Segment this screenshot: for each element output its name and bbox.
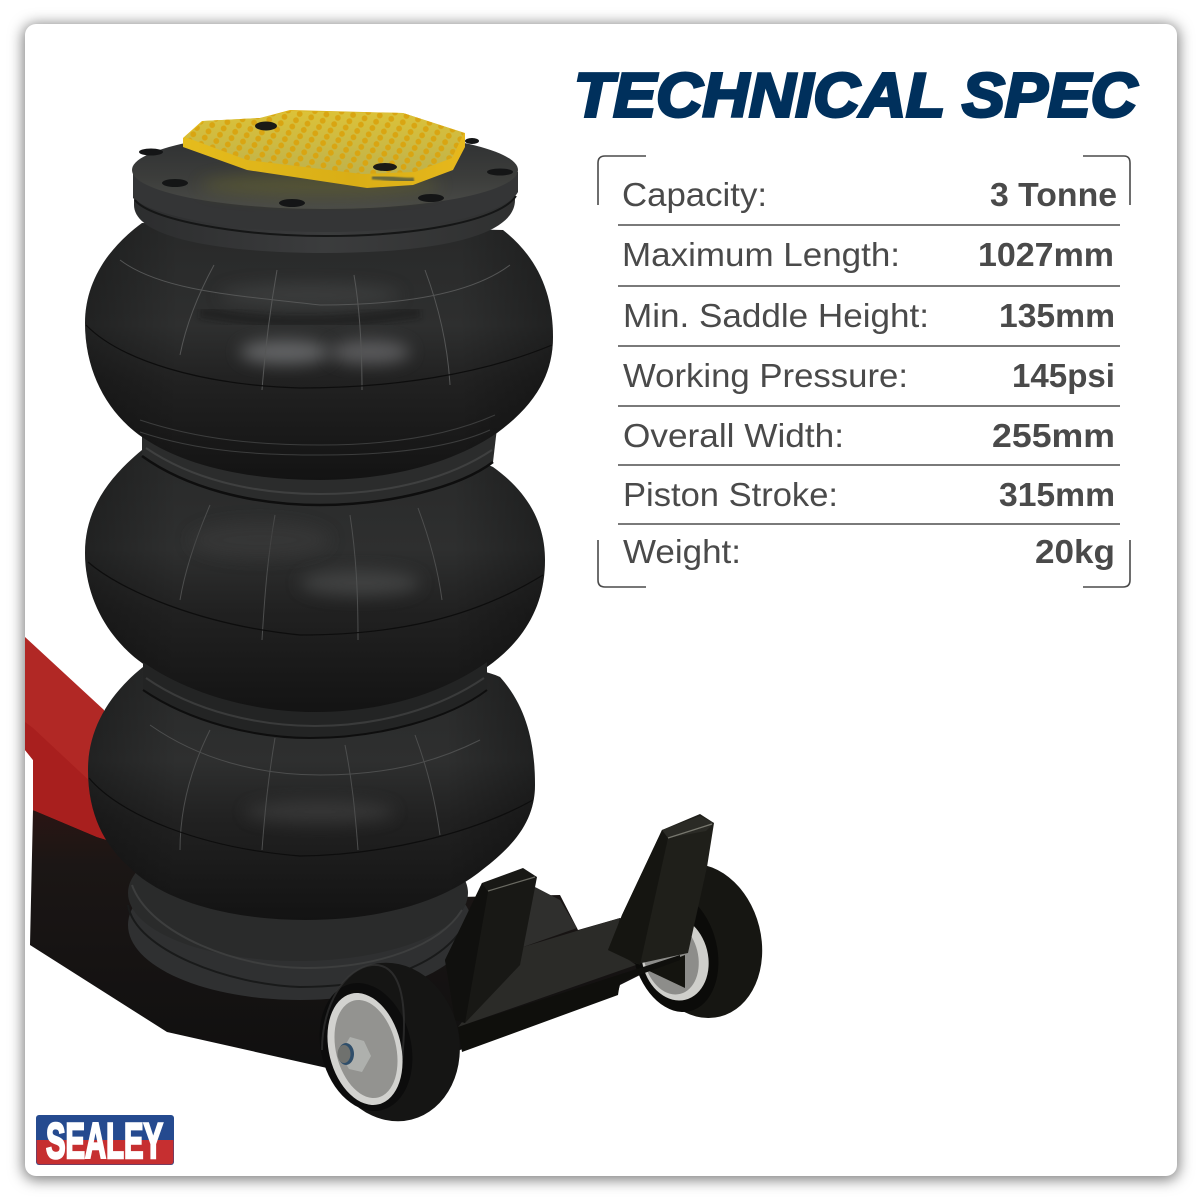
yellow saddle pad bbox=[183, 110, 465, 188]
row: min saddle height: Min. Saddle Height: bbox=[623, 297, 929, 334]
corner brackets bbox=[598, 156, 1130, 587]
ring between lower and middle bellows bbox=[143, 662, 487, 738]
row: weight: 20kg bbox=[1035, 533, 1115, 570]
foot plate bbox=[458, 880, 680, 1052]
saddle fixings bbox=[255, 122, 397, 171]
row: overall width: Overall Width: bbox=[623, 417, 844, 454]
row: overall width bbox=[623, 417, 1115, 454]
row dividers bbox=[618, 225, 1120, 524]
rear wheel bracket bbox=[608, 814, 714, 965]
base plate bbox=[30, 810, 640, 1068]
row: min saddle height: 135mm bbox=[999, 297, 1115, 334]
row: capacity: 3 Tonne bbox=[990, 176, 1117, 213]
row: min saddle height bbox=[623, 297, 1115, 334]
rear wheel bbox=[635, 866, 762, 1018]
lower wheel bracket bbox=[445, 868, 537, 1023]
row: overall width: 255mm bbox=[992, 417, 1115, 454]
row: working pressure: Working Pressure: bbox=[623, 357, 908, 394]
row: maximum length: Maximum Length: bbox=[622, 236, 900, 273]
row: working pressure bbox=[623, 357, 1115, 394]
logo: brand badge bbox=[36, 1113, 174, 1169]
middle bellow bbox=[85, 439, 545, 715]
row: weight: Weight: bbox=[623, 533, 741, 570]
panel: specification table bbox=[598, 156, 1130, 587]
row: maximum length: 1027mm bbox=[978, 236, 1114, 273]
lower bellow bbox=[88, 655, 535, 920]
ring between middle and top bellows bbox=[142, 428, 497, 505]
front wheel bbox=[321, 962, 460, 1122]
title: TECHNICAL SPEC bbox=[574, 62, 1138, 130]
row: weight bbox=[623, 533, 1115, 570]
row: maximum length bbox=[622, 236, 1114, 273]
top bellow bbox=[85, 223, 553, 480]
row: piston stroke: 315mm bbox=[999, 476, 1115, 513]
row: capacity bbox=[622, 176, 1117, 213]
illustration: air jack bbox=[25, 110, 778, 1136]
row: piston stroke bbox=[623, 476, 1115, 513]
base cylinder bbox=[128, 873, 468, 1000]
wheel nut and bolt bbox=[338, 1037, 371, 1072]
row: working pressure: 145psi bbox=[1012, 357, 1115, 394]
logo: brand badge: SEALEY bbox=[46, 1113, 163, 1169]
top plate bbox=[132, 131, 518, 253]
plate bolt holes bbox=[139, 138, 513, 207]
row: capacity: Capacity: bbox=[622, 176, 767, 213]
row: piston stroke: Piston Stroke: bbox=[623, 476, 838, 513]
red handle bbox=[25, 637, 106, 840]
